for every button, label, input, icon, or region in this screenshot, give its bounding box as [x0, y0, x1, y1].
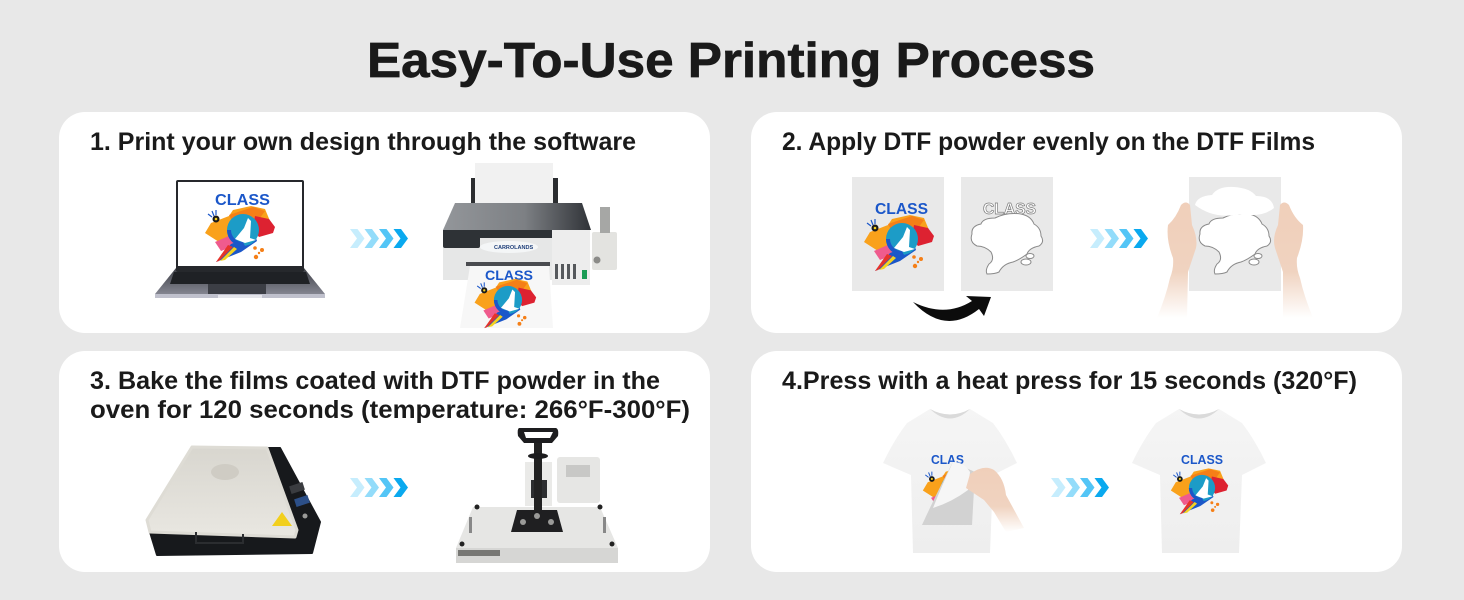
panel: step 3 bake: [59, 351, 710, 572]
icon: left hand: [1157, 202, 1196, 318]
icon: laptop with design: [155, 180, 325, 298]
heading: step 2: 2. Apply DTF powder evenly on the DTF Films: [782, 128, 1315, 156]
heading: step 3: oven for 120 seconds (temperature: 266°F-300°F): [90, 396, 690, 424]
film with printed design: [852, 177, 944, 291]
t-shirt with film being peeled: [883, 409, 1024, 553]
film with powder outline: CLASS: [983, 201, 1036, 218]
title: Easy-To-Use Printing Process: [367, 34, 1095, 88]
icon: DTF printer: [443, 163, 617, 328]
heading: step 1: 1. Print your own design through the software: [90, 128, 636, 156]
arrow: step 3 chevrons: [350, 478, 408, 497]
heading: step 4: 4.Press with a heat press for 15 seconds (320°F): [782, 367, 1357, 395]
icon: DTF printer: CLASS: [485, 267, 533, 283]
icon: DTF printer: CARROLANDS: [494, 245, 533, 251]
icon: peeling hand: [966, 468, 1024, 532]
icon: heat press: [456, 428, 618, 563]
heading: step 3: 3. Bake the films coated with DTF powder in the: [90, 367, 660, 395]
film held by hands: [1157, 177, 1313, 318]
arrow: step 4 chevrons: [1051, 478, 1109, 497]
panel: step 1 print: [59, 112, 710, 333]
icon: laptop with design: CLASS: [215, 192, 270, 209]
t-shirt with finished print: [1132, 409, 1266, 553]
arrow: step 2 chevrons: [1090, 229, 1148, 248]
icon: right hand: [1274, 202, 1313, 318]
t-shirt with finished print: CLASS: [1181, 452, 1223, 467]
t-shirt with film being peeled: CLAS: [931, 452, 964, 467]
arrow: curved black: [913, 296, 991, 321]
panel: step 2 powder: [751, 112, 1402, 333]
film with powder outline: [961, 177, 1053, 291]
panel: step 4 press: [751, 351, 1402, 572]
icon: curing oven: [147, 447, 320, 555]
film sheet: [922, 462, 975, 525]
film with printed design: CLASS: [875, 201, 928, 218]
heading: step 3: [90, 367, 690, 424]
arrow: step 1 chevrons: [350, 229, 408, 248]
